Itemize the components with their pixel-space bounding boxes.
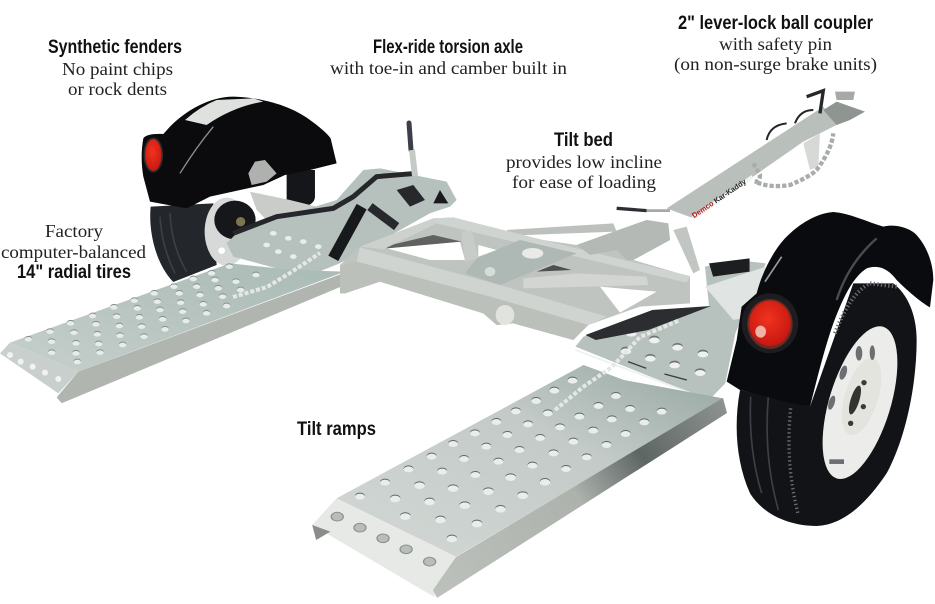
- beam joint: [496, 305, 514, 325]
- frame: [340, 217, 700, 340]
- strap handle: [709, 258, 750, 277]
- axle beam side: [340, 262, 588, 340]
- fender bracket: [248, 160, 277, 185]
- ramp chains: [233, 253, 680, 410]
- center bolt: [522, 248, 543, 259]
- right bed strap: [586, 306, 711, 340]
- label: tilt bed: provides low incline: [506, 152, 662, 172]
- upper torsion tube: [507, 223, 617, 236]
- front fender: [727, 212, 933, 407]
- label: ball coupler: with safety pin: [719, 34, 832, 54]
- lower strut: [523, 273, 648, 288]
- upper diagonal rail: [433, 217, 690, 283]
- rear tilt bed plate: [227, 168, 457, 277]
- label: tilt ramps: Tilt ramps: [297, 419, 376, 440]
- label: flex-ride torsion axle: [330, 37, 567, 78]
- brake wires: [767, 110, 813, 140]
- label: synthetic fenders: No paint chips: [62, 59, 173, 79]
- brand sticker: Demco Kar-Kaddy: [690, 176, 749, 220]
- label: radial tires: Factory: [45, 221, 103, 241]
- front tilt ramp: [312, 365, 723, 597]
- label: flex-ride torsion axle: with toe-in and camber built in: [330, 58, 567, 78]
- label: ball coupler: [674, 13, 877, 75]
- tongue base: [577, 220, 670, 260]
- ball coupler: [823, 102, 865, 125]
- tongue support: [803, 133, 820, 170]
- tire: [737, 283, 917, 526]
- front tail light: [742, 293, 798, 353]
- label: tilt bed: [506, 130, 662, 192]
- label: tilt bed: for ease of loading: [512, 172, 656, 192]
- cross strut: [462, 230, 478, 262]
- rear tire and wheel: [150, 170, 317, 282]
- ramp side wall: [433, 398, 727, 598]
- label: radial tires: 14" radial tires: [17, 262, 131, 283]
- rear bed tie-down straps: [233, 173, 417, 233]
- left tilt ramp: [0, 263, 345, 403]
- label: synthetic fenders: Synthetic fenders: [48, 37, 182, 58]
- label: ball coupler: 2" lever-lock ball coupler: [678, 13, 874, 34]
- label: radial tires: [1, 221, 146, 283]
- frame silhouette: [340, 217, 690, 340]
- label: synthetic fenders: or rock dents: [68, 79, 167, 99]
- label: flex-ride torsion axle: Flex-ride torsion axle: [373, 37, 523, 58]
- rim: [807, 318, 913, 487]
- coupler lever: [807, 91, 823, 113]
- rear tail light: [144, 138, 162, 172]
- fender highlight stripe: [185, 98, 263, 125]
- label: ball coupler: (on non-surge brake units): [674, 54, 877, 75]
- tongue: [617, 91, 865, 221]
- rear fender: [142, 97, 337, 208]
- axle beam top face: [357, 247, 607, 325]
- frame openings: [387, 242, 657, 313]
- rear bed lever: [409, 123, 415, 176]
- front wheel: [737, 283, 917, 526]
- central plate: [465, 240, 577, 285]
- label: tilt bed: Tilt bed: [554, 130, 613, 151]
- safety chain: [753, 133, 833, 186]
- side pull lever: [617, 208, 647, 211]
- label: synthetic fenders: [48, 37, 182, 99]
- right tilt bed plate: [575, 258, 766, 400]
- rear member shadow: [387, 235, 462, 248]
- label: radial tires: computer-balanced: [1, 242, 146, 262]
- tongue leg: [673, 227, 700, 273]
- ramp front lip with holes: [312, 498, 456, 597]
